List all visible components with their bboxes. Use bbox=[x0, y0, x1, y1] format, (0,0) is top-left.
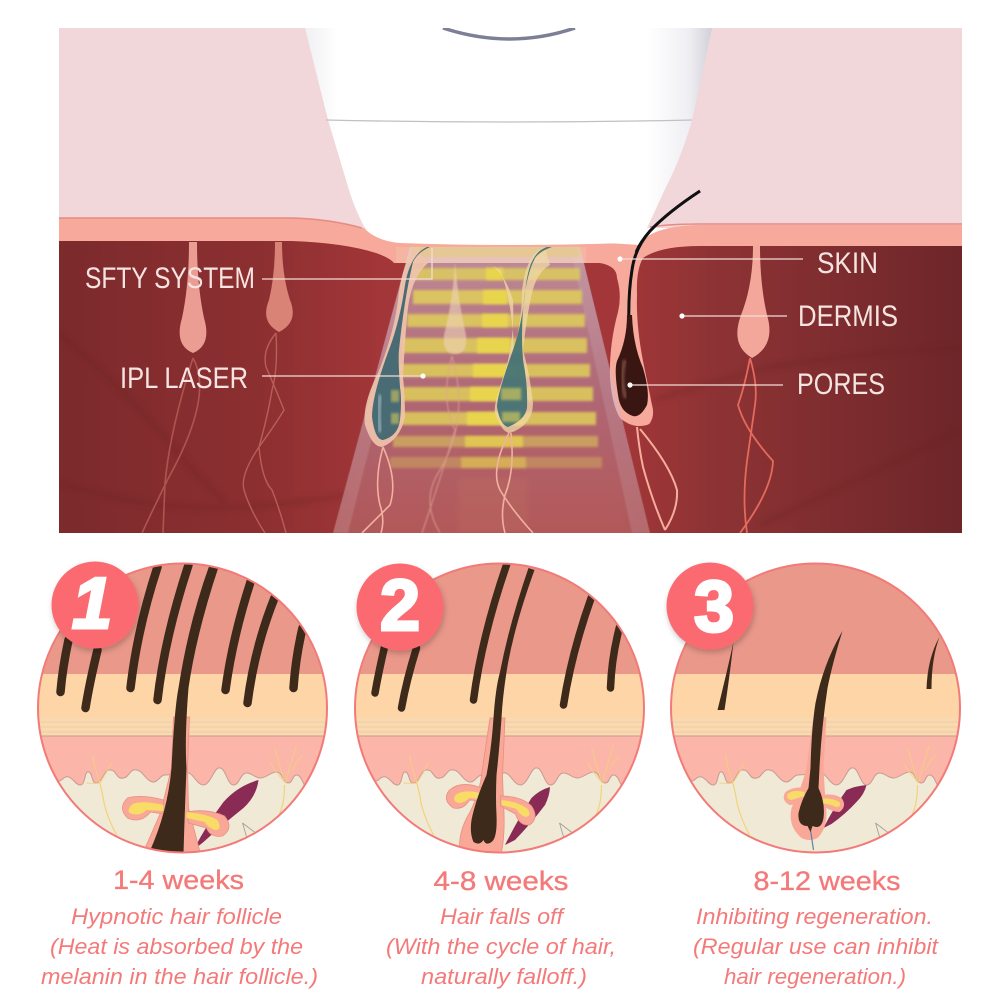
badge 1: 1 bbox=[72, 564, 112, 644]
hair over device edge bbox=[636, 191, 700, 252]
main hair bbox=[798, 631, 842, 832]
stage 3 diagram bbox=[666, 558, 966, 858]
dermis bbox=[59, 241, 962, 533]
arrector muscle bbox=[198, 780, 258, 846]
caption: stage 2 bbox=[386, 866, 616, 989]
circle outline bbox=[355, 564, 644, 852]
badge 3: 3 bbox=[694, 567, 734, 647]
bright stripe highlight bbox=[461, 268, 526, 468]
label: DERMIS: DERMIS bbox=[798, 300, 898, 333]
caption: stage 2: naturally falloff.) bbox=[421, 964, 587, 989]
circle outline bbox=[671, 564, 960, 852]
caption: stage 3: (Regular use can inhibit bbox=[693, 934, 939, 959]
label: PORES bbox=[627, 373, 884, 394]
badge 3 bbox=[666, 562, 754, 650]
background follicle 1 bbox=[142, 242, 206, 533]
caption: stage 1: Hypnotic hair follicle bbox=[71, 904, 282, 929]
label: SKIN: SKIN bbox=[817, 247, 878, 280]
root thread bbox=[810, 830, 814, 850]
gland and sheath bbox=[446, 718, 535, 852]
caption: stage 2: 4-8 weeks bbox=[434, 866, 568, 896]
label: PORES: PORES bbox=[797, 368, 885, 401]
gland and sheath bbox=[784, 717, 844, 840]
arrector muscle bbox=[824, 785, 866, 828]
caption: stage 3: hair regeneration.) bbox=[724, 964, 906, 989]
caption: stage 1 bbox=[41, 865, 318, 989]
caption: stage 1: melanin in the hair follicle.) bbox=[41, 964, 318, 989]
short hairs bbox=[375, 565, 620, 708]
short tapered hairs bbox=[718, 637, 940, 710]
caption: stage 1: 1-4 weeks bbox=[113, 865, 244, 895]
device window bbox=[443, 28, 575, 39]
IPL device head bbox=[305, 28, 712, 245]
skin layer bbox=[59, 217, 962, 426]
panel: skin cross-section with IPL device bbox=[59, 28, 962, 533]
gland and sheath bbox=[122, 717, 229, 854]
circle outline bbox=[38, 564, 327, 852]
background follicle 2 bbox=[243, 242, 293, 533]
badge 2: 2 bbox=[380, 566, 420, 646]
badge 1 bbox=[52, 562, 138, 648]
caption: stage 2: (With the cycle of hair, bbox=[386, 934, 616, 959]
short hairs bbox=[60, 565, 302, 708]
follicle in beam: middle faint bbox=[422, 262, 466, 533]
follicle in beam: left bbox=[362, 247, 430, 533]
label: SFTY SYSTEM: SFTY SYSTEM bbox=[85, 262, 255, 295]
follicle in beam: center-right bbox=[487, 247, 552, 533]
caption: stage 2: Hair falls off bbox=[440, 904, 566, 929]
stage 2 diagram bbox=[350, 558, 650, 858]
main hair bbox=[148, 565, 218, 854]
label: IPL LASER bbox=[122, 367, 426, 388]
background follicle right bbox=[737, 246, 773, 533]
caption: stage 3 bbox=[693, 866, 939, 989]
pink background above skin bbox=[59, 28, 962, 228]
yellow light stripes bbox=[390, 247, 602, 468]
IPL light beam bbox=[333, 247, 650, 533]
right follicle nerve threads bbox=[637, 427, 677, 530]
label: IPL LASER: IPL LASER bbox=[120, 362, 248, 395]
badge 2 bbox=[356, 564, 444, 650]
caption: stage 1: (Heat is absorbed by the bbox=[50, 934, 303, 959]
caption: stage 3: 8-12 weeks bbox=[754, 866, 900, 896]
label: DERMIS bbox=[679, 305, 897, 326]
caption: stage 3: Inhibiting regeneration. bbox=[696, 904, 933, 929]
dermis streaks bbox=[294, 388, 689, 503]
faint lower glow bbox=[458, 478, 528, 533]
arrector muscle bbox=[505, 787, 550, 845]
stage 1 diagram bbox=[32, 558, 332, 858]
main hair bbox=[471, 568, 534, 844]
right follicle hair and bulb bbox=[616, 191, 700, 416]
label: SKIN bbox=[617, 252, 876, 274]
label: SFTY SYSTEM bbox=[86, 248, 433, 288]
